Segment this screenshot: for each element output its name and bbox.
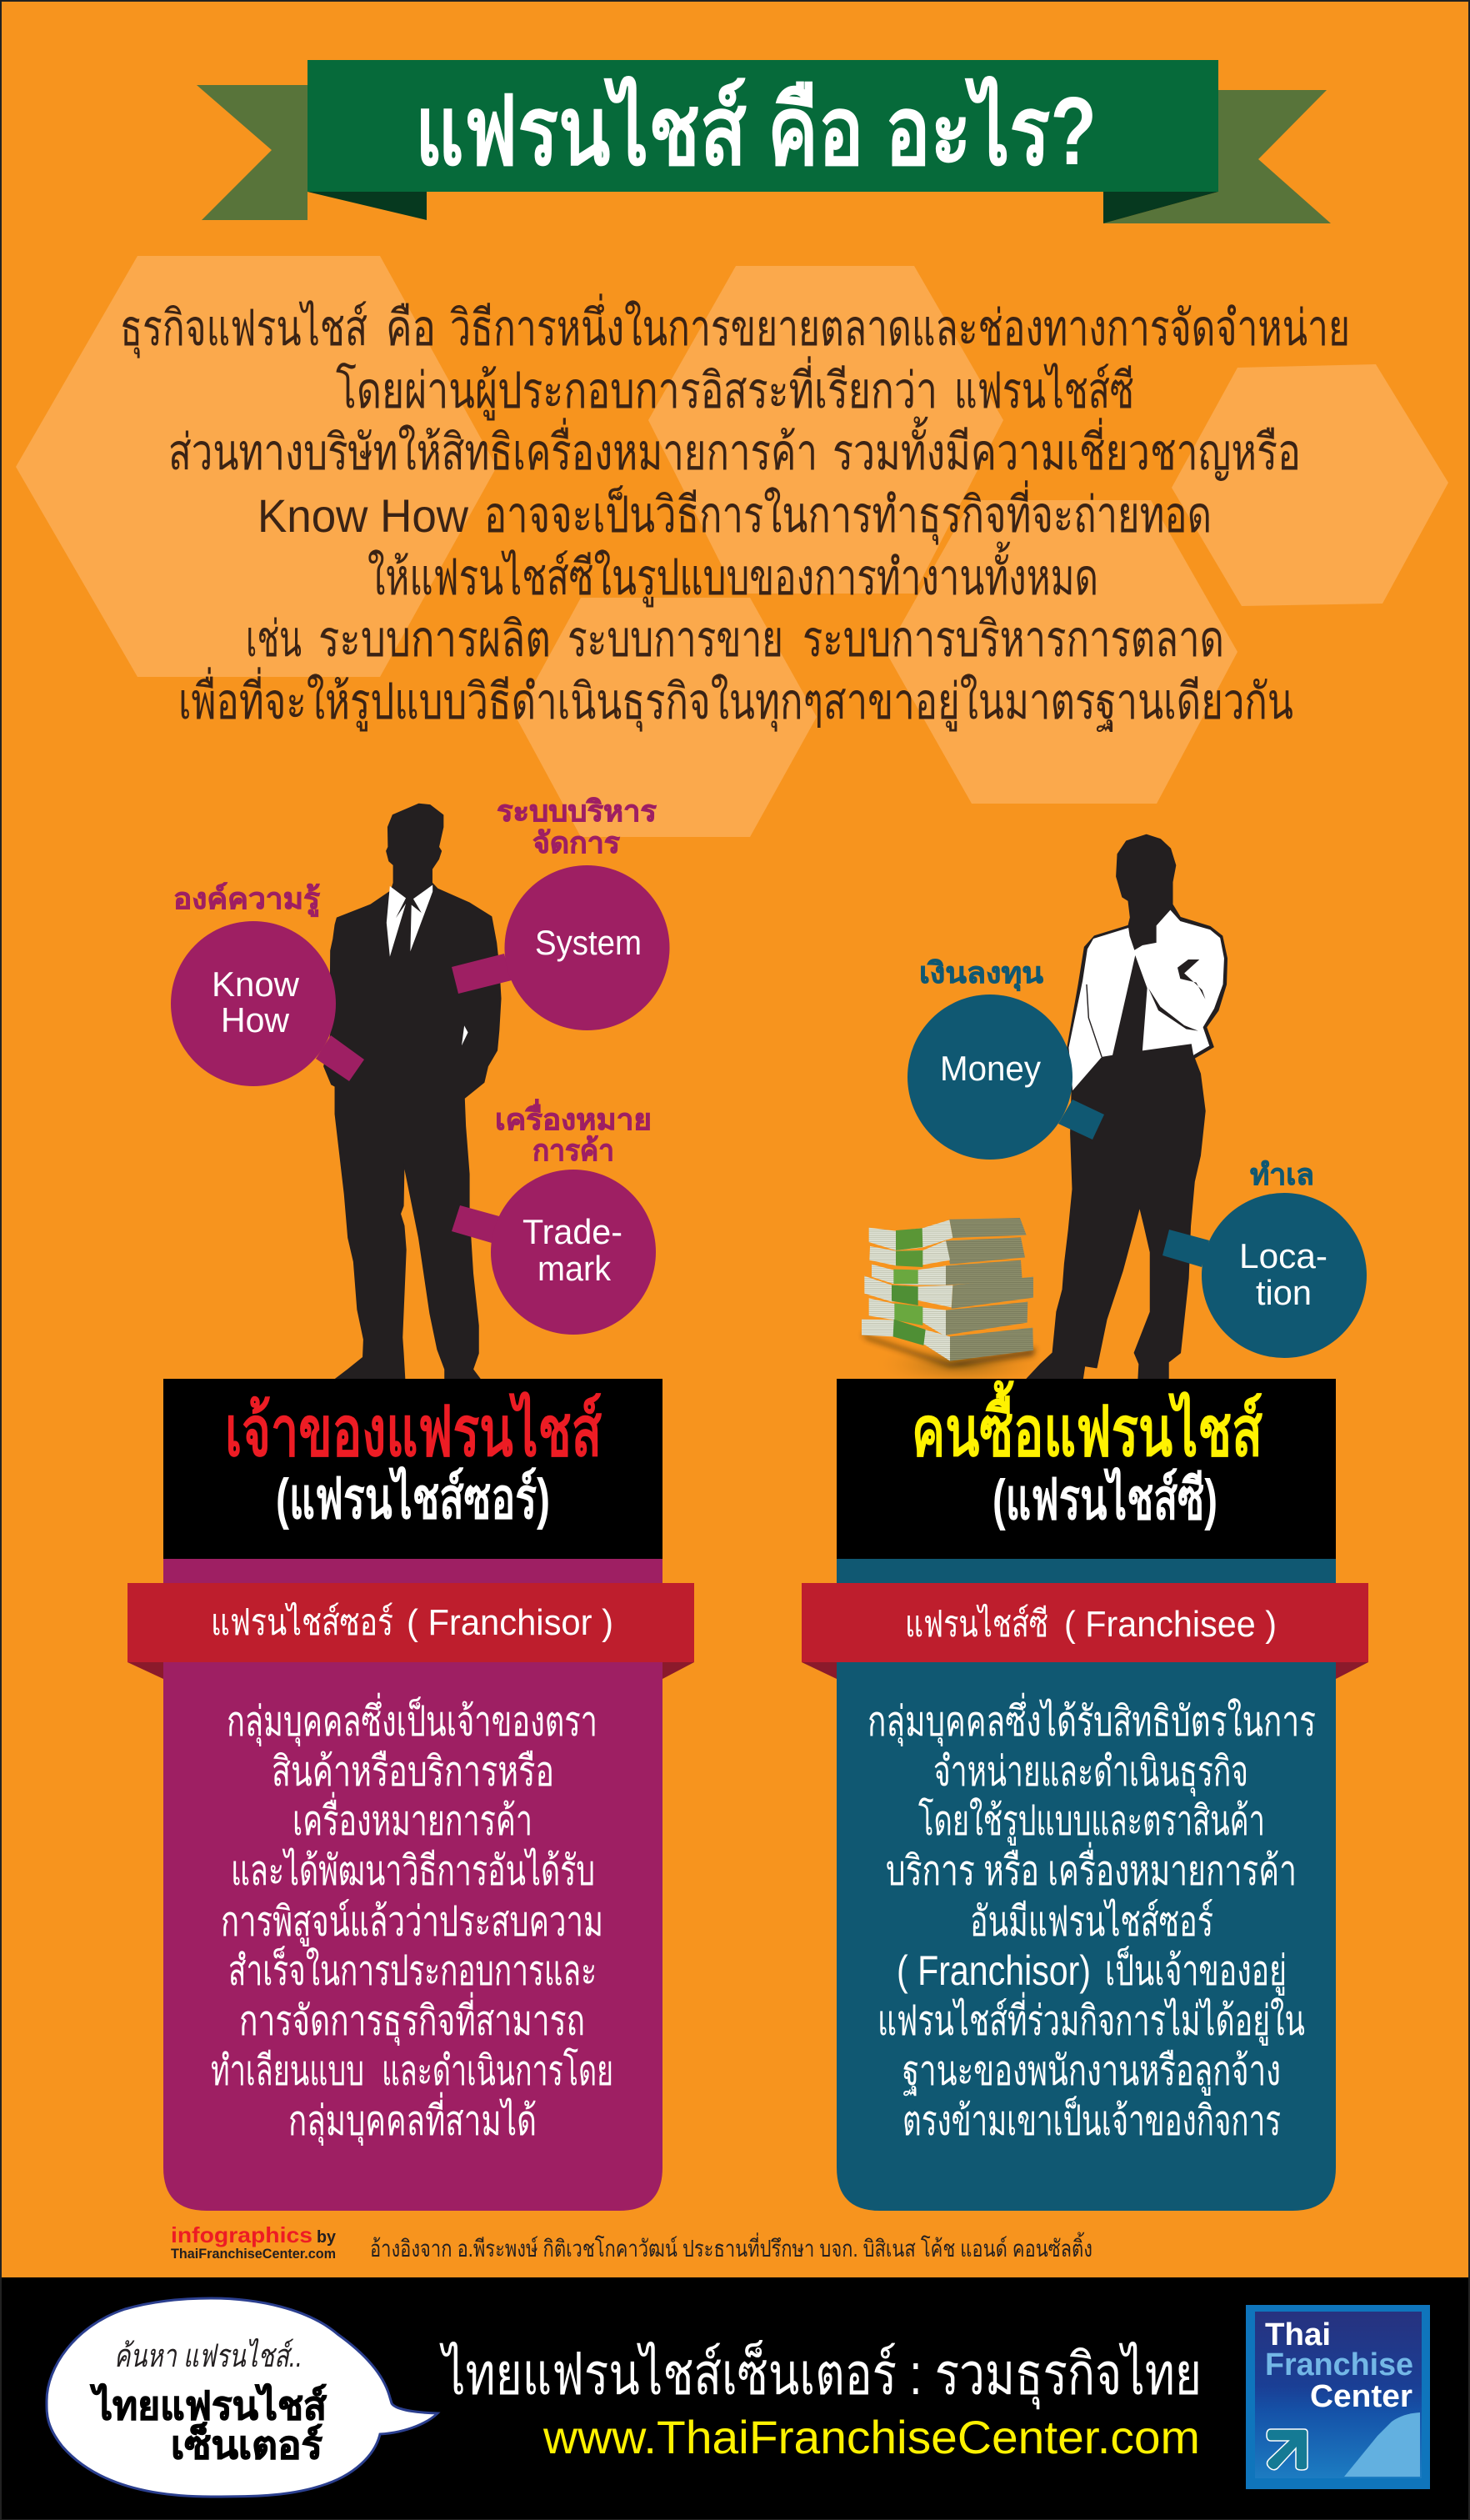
- bubble: System: [452, 865, 670, 1030]
- infographics credit: [171, 2222, 337, 2262]
- header box: คนซื้อแฟรนไชส์: [912, 1380, 1263, 1470]
- label: management system: จัดการ: [532, 827, 620, 859]
- intro paragraph: รวมทั้งมีความเชี่ยวชาญหรือ: [832, 416, 1301, 481]
- body text: ( Franchisor): [897, 1947, 1091, 1994]
- intro paragraph: ระบบการบริหารการตลาด: [802, 611, 1224, 667]
- body text: การจัดการธุรกิจที่สามารถ: [239, 1992, 585, 2046]
- header box: (แฟรนไชส์ซี): [992, 1466, 1218, 1531]
- speech bubble: [47, 2298, 438, 2497]
- footer band: [2, 2277, 1468, 2519]
- body text: การพิสูจน์แล้วว่าประสบความ: [221, 1898, 603, 1946]
- body text: ตรงข้ามเขาเป็นเจ้าของกิจการ: [902, 2096, 1281, 2144]
- intro paragraph: Know How: [258, 489, 469, 542]
- bubble: Trademark: Trade-: [522, 1212, 622, 1251]
- label: trademark: เครื่องหมาย: [495, 1099, 652, 1136]
- infographics credit: infographics: [171, 2222, 312, 2247]
- bubble: Money: [908, 994, 1104, 1160]
- intro paragraph: [120, 293, 1350, 732]
- label: trademark: [495, 1099, 652, 1167]
- body text: สินค้าหรือบริการหรือ: [272, 1748, 554, 1795]
- header box: [163, 1379, 662, 1559]
- panel: franchisee: [802, 1379, 1368, 2211]
- infographics credit: by: [317, 2228, 337, 2247]
- intro paragraph: ระบบการขาย: [568, 611, 783, 667]
- bubble: Money: Money: [940, 1049, 1041, 1088]
- body text: อันมีแฟรนไชส์ซอร์: [970, 1898, 1213, 1945]
- body text: เป็นเจ้าของอยู่: [1105, 1946, 1287, 1996]
- bubble: Location: tion: [1256, 1273, 1312, 1312]
- infographics credit: ThaiFranchiseCenter.com: [171, 2246, 336, 2262]
- hexagon background pattern: [16, 256, 1448, 837]
- bubble: System: System: [535, 923, 642, 962]
- ribbon: แฟรนไชส์ซอร์: [211, 1601, 393, 1643]
- body text: [211, 1693, 613, 2146]
- body text: เครื่องหมายการค้า: [292, 1792, 532, 1844]
- body text: กลุ่มบุคคลซึ่งเป็นเจ้าของตรา: [227, 1693, 598, 1746]
- intro paragraph: ให้แฟรนไชส์ซีในรูปแบบของการทำงานทั้งหมด: [368, 541, 1098, 608]
- bubble: Know How: How: [221, 1000, 290, 1040]
- ribbon: แฟรนไชส์ซี: [905, 1603, 1048, 1645]
- intro paragraph: ระบบการผลิต: [318, 611, 551, 667]
- logo: Thai Franchise Center: [1246, 2305, 1430, 2489]
- intro paragraph: ธุรกิจแฟรนไชส์: [120, 299, 368, 358]
- bubble: Know How: [171, 921, 364, 1086]
- intro paragraph: เช่น: [246, 611, 302, 667]
- speech bubble: ไทยแฟรนไชส์: [89, 2382, 327, 2427]
- label: management system: ระบบบริหาร: [497, 795, 657, 828]
- label: location: ทำเล: [1250, 1159, 1314, 1191]
- icon: stack of banknotes: [861, 1218, 1050, 1390]
- logo: Thai Franchise Center: Thai: [1265, 2317, 1331, 2352]
- bubble: Know How: Know: [212, 964, 300, 1004]
- logo: Thai Franchise Center: Franchise: [1265, 2347, 1413, 2382]
- body text: กลุ่มบุคคลซึ่งได้รับสิทธิบัตรในการ: [868, 1693, 1316, 1746]
- label: knowledge: องค์ความรู้: [173, 882, 320, 917]
- bubble: Location: Loca-: [1239, 1236, 1328, 1275]
- label: investment: เงินลงทุน: [919, 957, 1043, 991]
- footer headline: ไทยแฟรนไชส์เซ็นเตอร์ : รวมธุรกิจไทย: [439, 2340, 1202, 2410]
- intro paragraph: ส่วนทางบริษัทให้สิทธิเครื่องหมายการค้า: [168, 418, 818, 480]
- body text: ทำเลียนแบบ: [211, 2047, 364, 2094]
- bubble: Location: [1162, 1193, 1367, 1358]
- body text: สำเร็จในการประกอบการและ: [228, 1946, 597, 1994]
- intro paragraph: อาจจะเป็นวิธีการในการทำธุรกิจที่จะถ่ายทอด: [484, 480, 1212, 545]
- bubble: Trademark: mark: [538, 1249, 612, 1288]
- footer url: www.ThaiFranchiseCenter.com: [542, 2411, 1200, 2463]
- body text: [868, 1693, 1316, 2144]
- header box: เจ้าของแฟรนไชส์: [225, 1391, 602, 1470]
- title ribbon: [197, 60, 1331, 223]
- ribbon: ( Franchisee ): [1064, 1604, 1277, 1645]
- body text: บริการ หรือ เครื่องหมายการค้า: [886, 1842, 1297, 1894]
- body text: โดยใช้รูปแบบและตราสินค้า: [918, 1797, 1265, 1846]
- body text: ฐานะของพนักงานหรือลูกจ้าง: [902, 2047, 1281, 2096]
- label: management system: [497, 795, 657, 859]
- header box: [837, 1379, 1336, 1559]
- logo: Thai Franchise Center: Center: [1310, 2379, 1412, 2414]
- intro paragraph: โดยผ่านผู้ประกอบการอิสระที่เรียกว่า: [336, 356, 938, 421]
- intro paragraph: คือ: [386, 300, 436, 356]
- label: trademark: การค้า: [532, 1135, 614, 1167]
- intro paragraph: แฟรนไชส์ซี: [954, 362, 1134, 418]
- speech bubble: ค้นหา แฟรนไชส์..: [114, 2337, 302, 2374]
- ribbon: [802, 1583, 1368, 1679]
- ribbon: [128, 1583, 694, 1679]
- panel: franchisor: [128, 1379, 694, 2211]
- ribbon: ( Franchisor ): [407, 1602, 613, 1643]
- body text: แฟรนไชส์ที่ร่วมกิจการไม่ได้อยู่ใน: [878, 1992, 1305, 2046]
- body text: และได้พัฒนาวิธีการอันได้รับ: [231, 1847, 595, 1894]
- body text: และดำเนินการโดย: [382, 2047, 613, 2094]
- header box: (แฟรนไชส์ซอร์): [276, 1465, 550, 1531]
- body text: จำหน่ายและดำเนินธุรกิจ: [933, 1748, 1248, 1796]
- speech bubble: เซ็นเตอร์: [171, 2422, 322, 2467]
- title: แฟรนไชส์ คือ อะไร?: [415, 76, 1097, 185]
- source citation: อ้างอิงจาก อ.พีระพงษ์ กิติเวชโกคาวัฒน์ ประธานที่ปรึกษา บจก. บิสิเนส โค้ช แอนด์ คอนซัลติ้ง: [370, 2232, 1092, 2262]
- silhouette: franchisor man in suit: [324, 804, 501, 1380]
- bubble: Trademark: [452, 1170, 656, 1335]
- silhouette: franchisee man in white shirt: [1027, 834, 1227, 1379]
- body text: กลุ่มบุคคลที่สามได้: [288, 2092, 537, 2146]
